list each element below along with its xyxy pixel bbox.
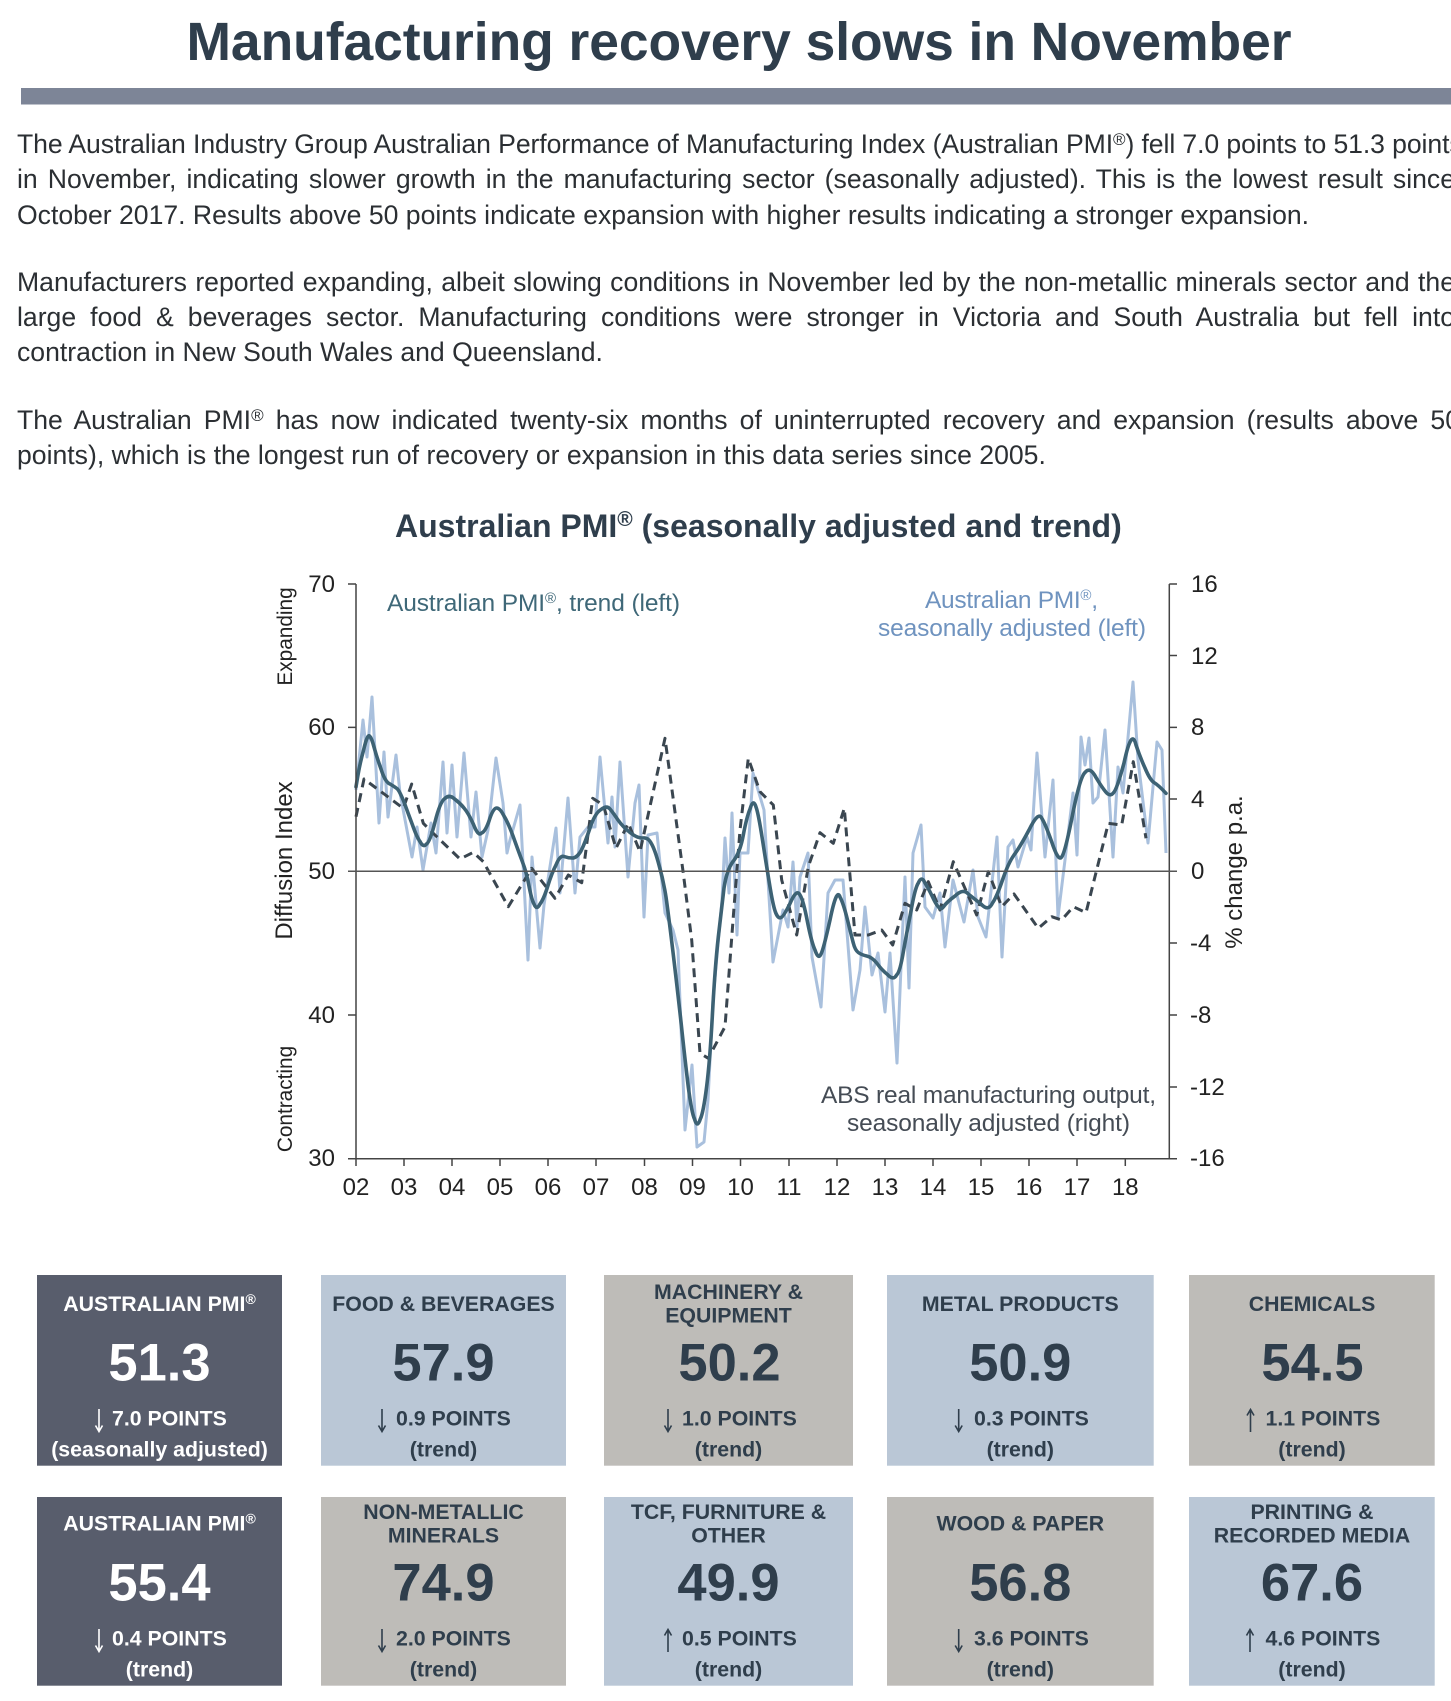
right axis labels: 0 bbox=[1191, 858, 1204, 885]
axis title: Diffusion Index: Diffusion Index bbox=[271, 781, 298, 940]
year axis labels: 10 bbox=[727, 1174, 754, 1201]
series: ABS real manufacturing output bbox=[356, 738, 1146, 1058]
series: PMI seasonally adjusted bbox=[356, 682, 1166, 1147]
card: Australian PMI seasonally adjusted: 51.3 bbox=[108, 1334, 211, 1393]
legend: ABS output: ABS real manufacturing output, bbox=[821, 1082, 1156, 1109]
card: TCF, Furniture & Other: OTHER bbox=[691, 1524, 766, 1548]
legend: seasonally adjusted: seasonally adjusted (left) bbox=[878, 615, 1146, 642]
card: Printing & Recorded Media: (trend) bbox=[1278, 1658, 1346, 1682]
left axis labels bbox=[308, 571, 335, 1172]
year axis labels: 05 bbox=[487, 1174, 513, 1201]
card: Australian PMI trend: 55.4 bbox=[108, 1554, 211, 1613]
legend: ABS output bbox=[821, 1082, 1156, 1137]
right axis labels: -12 bbox=[1190, 1074, 1225, 1101]
card: Chemicals bbox=[1189, 1275, 1435, 1466]
right axis labels: -16 bbox=[1190, 1145, 1225, 1172]
right axis labels: 16 bbox=[1191, 571, 1218, 598]
text block: intro paragraphs: points), which is the longest run of recovery or expansion in this data series since 2005. bbox=[17, 440, 1046, 470]
card: Machinery & Equipment bbox=[604, 1275, 853, 1466]
card: TCF, Furniture & Other: 0.5 POINTS bbox=[682, 1627, 797, 1651]
legend: seasonally adjusted: Australian PMI bbox=[925, 587, 1081, 614]
icon: down arrow bbox=[378, 1409, 386, 1432]
legend: seasonally adjusted: ® bbox=[1080, 587, 1091, 604]
card: Australian PMI seasonally adjusted: (seasonally adjusted) bbox=[51, 1438, 268, 1462]
right axis labels: -4 bbox=[1190, 930, 1211, 957]
card: Metal Products: (trend) bbox=[987, 1438, 1054, 1462]
icon: down arrow bbox=[664, 1409, 672, 1432]
year axis labels: 09 bbox=[679, 1174, 706, 1201]
left axis labels: 60 bbox=[308, 714, 335, 741]
legend: trend: ® bbox=[545, 590, 556, 607]
text block: intro paragraphs: contraction in New South Wales and Queensland. bbox=[17, 337, 603, 367]
card: Metal Products: 50.9 bbox=[969, 1334, 1071, 1393]
card: Australian PMI seasonally adjusted: ® bbox=[245, 1291, 256, 1307]
year axis labels: 14 bbox=[920, 1174, 946, 1201]
icon: up arrow bbox=[664, 1630, 672, 1652]
axes bbox=[348, 584, 1177, 1166]
header rule bbox=[21, 88, 1451, 104]
card: Wood & Paper: WOOD & PAPER bbox=[936, 1512, 1104, 1536]
icon: down arrow bbox=[378, 1629, 386, 1652]
card: Machinery & Equipment: 50.2 bbox=[678, 1334, 781, 1393]
legend: ABS output: seasonally adjusted (right) bbox=[847, 1110, 1130, 1137]
card: Wood & Paper bbox=[887, 1497, 1154, 1686]
legend: trend: Australian PMI bbox=[387, 590, 545, 617]
left axis labels: 50 bbox=[308, 858, 335, 885]
year axis labels: 04 bbox=[439, 1174, 465, 1201]
right axis labels: 4 bbox=[1191, 786, 1204, 813]
card: Machinery & Equipment: EQUIPMENT bbox=[665, 1304, 792, 1328]
card: Australian PMI trend: ® bbox=[245, 1511, 256, 1527]
icon: up arrow bbox=[1246, 1630, 1254, 1652]
card: Australian PMI seasonally adjusted: 7.0 POINTS bbox=[112, 1407, 227, 1431]
right axis labels: -8 bbox=[1190, 1002, 1211, 1029]
card: Machinery & Equipment: 1.0 POINTS bbox=[682, 1407, 797, 1431]
icon: up arrow bbox=[1247, 1410, 1254, 1432]
right axis labels: 12 bbox=[1191, 643, 1218, 670]
year axis labels: 17 bbox=[1064, 1174, 1090, 1201]
card: Chemicals: (trend) bbox=[1278, 1438, 1346, 1462]
year axis labels: 02 bbox=[343, 1174, 369, 1201]
chart title: Australian PMI bbox=[395, 508, 617, 544]
left axis labels: 30 bbox=[308, 1145, 335, 1172]
right axis labels: 8 bbox=[1191, 714, 1204, 741]
card: Australian PMI trend: 0.4 POINTS bbox=[112, 1627, 227, 1651]
card: Food & Beverages: 57.9 bbox=[392, 1334, 495, 1393]
icon: down arrow bbox=[955, 1409, 962, 1432]
text block: intro paragraphs: Manufacturers reported expanding, albeit slowing conditions in November led by the non-metallic minerals sector and the bbox=[17, 267, 1451, 297]
chart title: ® bbox=[617, 508, 633, 531]
card: Wood & Paper: (trend) bbox=[987, 1658, 1054, 1682]
left axis labels: 70 bbox=[308, 571, 335, 598]
card: Printing & Recorded Media: 4.6 POINTS bbox=[1266, 1627, 1380, 1651]
card: Non-Metallic Minerals: MINERALS bbox=[388, 1524, 499, 1548]
legend: trend: , trend (left) bbox=[556, 590, 680, 617]
card: Non-Metallic Minerals: 74.9 bbox=[392, 1554, 495, 1613]
year axis labels: 12 bbox=[824, 1174, 850, 1201]
card: Australian PMI trend bbox=[37, 1497, 282, 1686]
card: Australian PMI seasonally adjusted bbox=[37, 1275, 282, 1466]
card: TCF, Furniture & Other: 49.9 bbox=[677, 1554, 780, 1613]
card: Metal Products: 0.3 POINTS bbox=[974, 1407, 1089, 1431]
text block: intro paragraphs bbox=[17, 129, 1451, 470]
chart title: (seasonally adjusted and trend) bbox=[633, 508, 1122, 544]
icon: down arrow bbox=[955, 1629, 962, 1652]
card: Printing & Recorded Media bbox=[1189, 1497, 1435, 1686]
card: Non-Metallic Minerals: NON-METALLIC bbox=[363, 1500, 524, 1524]
title: Manufacturing recovery slows in November bbox=[186, 13, 1292, 72]
text block: intro paragraphs: October 2017. Results above 50 points indicate expansion with higher results indicating a stronger expansion. bbox=[17, 200, 1309, 230]
axis title: Expanding: Expanding bbox=[274, 587, 297, 686]
card: Australian PMI seasonally adjusted: AUSTRALIAN PMI bbox=[63, 1292, 245, 1316]
text block: intro paragraphs: in November, indicating slower growth in the manufacturing sector (seasonally adjusted). This is the lowest result since bbox=[17, 164, 1451, 194]
card: Printing & Recorded Media: RECORDED MEDIA bbox=[1214, 1524, 1410, 1548]
legend: seasonally adjusted: , bbox=[1091, 587, 1098, 614]
card: Non-Metallic Minerals: 2.0 POINTS bbox=[396, 1627, 511, 1651]
right axis labels bbox=[1190, 571, 1225, 1172]
card: Food & Beverages: 0.9 POINTS bbox=[396, 1407, 511, 1431]
card: Food & Beverages bbox=[321, 1275, 566, 1466]
year axis labels: 03 bbox=[391, 1174, 417, 1201]
year axis labels: 07 bbox=[583, 1174, 609, 1201]
card: TCF, Furniture & Other: TCF, FURNITURE & bbox=[631, 1500, 826, 1524]
text block: intro paragraphs: large food & beverages sector. Manufacturing conditions were stronger in Victoria and South Australia but fell into bbox=[17, 302, 1451, 332]
card: Australian PMI trend: AUSTRALIAN PMI bbox=[63, 1512, 245, 1536]
left axis labels: 40 bbox=[308, 1002, 335, 1029]
card: TCF, Furniture & Other bbox=[604, 1497, 853, 1686]
legend: seasonally adjusted bbox=[878, 587, 1146, 642]
year axis labels: 16 bbox=[1016, 1174, 1042, 1201]
text block: intro paragraphs: The Australian Industry Group Australian Performance of Manufacturing Index (Australian PMI®) fell 7.0 points to 51.3 points bbox=[17, 129, 1451, 159]
card: Australian PMI trend: (trend) bbox=[126, 1658, 193, 1682]
year axis labels: 08 bbox=[631, 1174, 658, 1201]
card: Non-Metallic Minerals bbox=[321, 1497, 566, 1686]
year axis labels bbox=[343, 1174, 1139, 1201]
card: Food & Beverages: (trend) bbox=[410, 1438, 477, 1462]
card: Chemicals: 1.1 POINTS bbox=[1266, 1407, 1380, 1431]
series: PMI trend bbox=[356, 736, 1166, 1124]
line chart: Australian PMI and ABS output bbox=[271, 571, 1248, 1201]
card: Printing & Recorded Media: 67.6 bbox=[1261, 1554, 1363, 1613]
card: Machinery & Equipment: MACHINERY & bbox=[654, 1280, 803, 1304]
year axis labels: 18 bbox=[1112, 1174, 1139, 1201]
year axis labels: 11 bbox=[777, 1174, 801, 1201]
card: TCF, Furniture & Other: (trend) bbox=[695, 1658, 762, 1682]
card: Chemicals: 54.5 bbox=[1261, 1334, 1364, 1393]
icon: down arrow bbox=[96, 1409, 102, 1432]
axis title: % change p.a.: % change p.a. bbox=[1221, 795, 1248, 949]
card: Printing & Recorded Media: PRINTING & bbox=[1250, 1500, 1374, 1524]
text block: intro paragraphs: The Australian PMI® has now indicated twenty-six months of uninterrupted recovery and expansion (results above 50 bbox=[17, 405, 1451, 435]
card: Non-Metallic Minerals: (trend) bbox=[410, 1658, 477, 1682]
card: Chemicals: CHEMICALS bbox=[1249, 1292, 1375, 1316]
axis title: Contracting: Contracting bbox=[274, 1046, 297, 1152]
year axis labels: 15 bbox=[968, 1174, 994, 1201]
card: Wood & Paper: 3.6 POINTS bbox=[974, 1627, 1089, 1651]
icon: down arrow bbox=[96, 1629, 102, 1652]
card: Metal Products: METAL PRODUCTS bbox=[922, 1292, 1119, 1316]
card: Metal Products bbox=[887, 1275, 1154, 1466]
card: Food & Beverages: FOOD & BEVERAGES bbox=[332, 1292, 555, 1316]
card: Machinery & Equipment: (trend) bbox=[695, 1438, 762, 1462]
year axis labels: 06 bbox=[535, 1174, 561, 1201]
card: Wood & Paper: 56.8 bbox=[969, 1554, 1071, 1613]
year axis labels: 13 bbox=[872, 1174, 898, 1201]
